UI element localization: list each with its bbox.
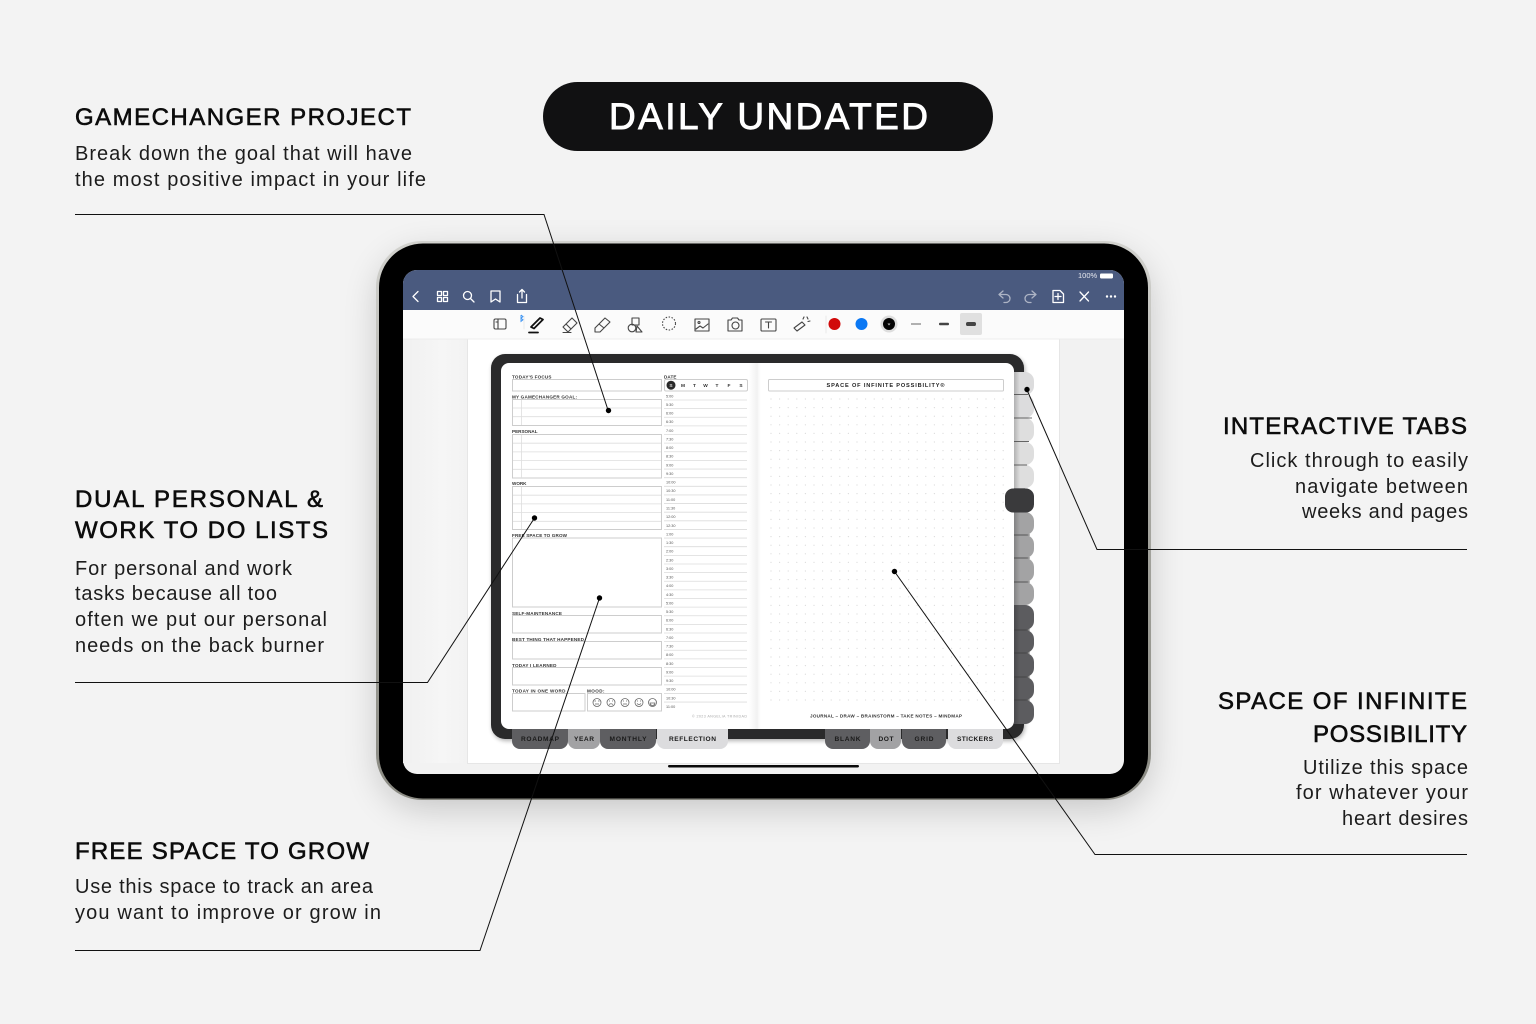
right page: dot grid: SPACE OF INFINITE POSSIBILITY® — [826, 382, 945, 389]
side gutters and page — [403, 339, 468, 763]
daily schedule column: 7:30 — [666, 438, 673, 442]
daily schedule column: 8:00 — [666, 446, 673, 450]
bottom tabs: DOT — [878, 736, 894, 743]
left page form: MOOD: — [587, 688, 605, 694]
bottom tabs: STICKERS — [957, 736, 994, 743]
callout: interactive tabs — [1223, 413, 1468, 523]
callout: free space to grow — [75, 838, 381, 924]
daily schedule column: F — [728, 383, 731, 389]
daily schedule column: © 2023 ANGELIA TRINIDAD — [692, 714, 747, 718]
leader line: gamechanger — [75, 214, 611, 413]
screen — [403, 270, 1124, 774]
daily schedule column: 12:30 — [666, 524, 676, 528]
bottom tabs: REFLECTION — [669, 736, 716, 743]
left page form: SELF-MAINTENANCE — [512, 611, 562, 616]
right page: dot grid: JOURNAL – DRAW – BRAINSTORM – TAKE NOTES – MINDMAP — [810, 714, 962, 718]
callout: interactive tabs: Click through to easily — [1250, 450, 1468, 472]
spine shadow — [749, 363, 761, 729]
daily schedule column — [664, 374, 748, 718]
daily schedule column: 11:30 — [666, 506, 675, 510]
daily schedule column: S — [669, 383, 673, 389]
daily schedule column: 4:30 — [666, 593, 673, 597]
callout: free space to grow: you want to improve or grow in — [75, 902, 381, 924]
daily schedule column: 10:00 — [666, 481, 676, 485]
daily schedule column: W — [703, 383, 708, 389]
daily schedule column: 2:00 — [666, 550, 673, 554]
bottom tabs: BLANK — [834, 736, 861, 743]
daily schedule column: DATE — [664, 374, 676, 380]
status: battery: 100% — [1078, 271, 1098, 280]
daily schedule column: 7:00 — [666, 636, 673, 640]
bottom tabs: GRID — [914, 736, 934, 743]
left page form — [512, 374, 662, 711]
left page form: TODAY IN ONE WORD — [512, 688, 566, 694]
daily schedule column: 6:30 — [666, 627, 673, 631]
callout: space of infinite possibility: for whatever your — [1296, 782, 1468, 804]
daily schedule column: 8:30 — [666, 662, 673, 666]
callout: dual personal and work lists: WORK TO DO LISTS — [75, 517, 328, 544]
callout: free space to grow: FREE SPACE TO GROW — [75, 838, 369, 865]
bluetooth mark — [521, 315, 523, 321]
left page form: FREE SPACE TO GROW — [512, 533, 568, 538]
daily schedule column: 6:30 — [666, 420, 673, 424]
toolbar — [403, 310, 1124, 339]
bottom tabs: ROADMAP — [521, 736, 560, 743]
daily schedule column: 11:00 — [666, 498, 675, 502]
callout: space of infinite possibility: SPACE OF INFINITE — [1218, 688, 1467, 715]
leader line: tabs — [1024, 387, 1467, 550]
callout: gamechanger project — [75, 104, 426, 191]
daily schedule column: 8:30 — [666, 455, 673, 459]
callout: gamechanger project: Break down the goal that will have — [75, 143, 412, 165]
daily schedule column: 10:30 — [666, 696, 676, 700]
daily schedule column: 9:30 — [666, 472, 673, 476]
toolbar tool icons — [494, 316, 826, 333]
callout: interactive tabs: navigate between — [1295, 476, 1468, 498]
daily schedule column: T — [693, 383, 696, 389]
mood faces — [593, 698, 656, 706]
status: battery — [1078, 271, 1113, 280]
daily schedule column: S — [739, 383, 743, 389]
callout: dual personal and work lists: often we put our personal — [75, 609, 327, 631]
daily schedule column: 2:30 — [666, 558, 673, 562]
daily schedule column: 9:00 — [666, 463, 673, 467]
daily schedule column: 3:30 — [666, 576, 673, 580]
left page form: WORK — [512, 481, 527, 486]
color swatches and stroke widths — [828, 313, 982, 335]
bottom tabs: MONTHLY — [610, 736, 647, 743]
tablet — [376, 241, 1151, 807]
daily schedule column: 11:00 — [666, 705, 675, 709]
daily schedule column: 1:00 — [666, 532, 673, 536]
daily schedule column: 7:00 — [666, 429, 673, 433]
callout: free space to grow: Use this space to track an area — [75, 876, 374, 898]
daily schedule column: 5:00 — [666, 394, 673, 398]
bottom tabs — [512, 729, 1003, 749]
left page form: TODAY I LEARNED — [512, 663, 557, 668]
icons: header left — [413, 290, 526, 302]
daily schedule column: 10:30 — [666, 489, 676, 493]
daily schedule column: 1:30 — [666, 541, 673, 545]
leader line: infinite possibility — [892, 569, 1467, 854]
title pill — [543, 82, 993, 151]
left page form: BEST THING THAT HAPPENED — [512, 637, 585, 642]
daily schedule column: 12:00 — [666, 515, 676, 519]
callout: interactive tabs: weeks and pages — [1301, 501, 1468, 523]
daily schedule column: 4:00 — [666, 584, 673, 588]
bottom tabs: YEAR — [574, 736, 594, 743]
callout: dual personal and work lists: For personal and work — [75, 558, 293, 580]
daily schedule column: 6:00 — [666, 412, 673, 416]
planner — [491, 354, 1034, 749]
left page form: PERSONAL — [512, 429, 538, 434]
callout: space of infinite possibility: POSSIBILITY — [1313, 721, 1467, 748]
icons: header right — [999, 290, 1088, 302]
callout: gamechanger project: the most positive impact in your life — [75, 169, 426, 191]
daily schedule column: 5:30 — [666, 403, 673, 407]
right page: dot grid — [768, 380, 1006, 718]
callout: dual personal and work lists: DUAL PERSONAL & — [75, 486, 323, 513]
callout: space of infinite possibility: heart desires — [1342, 808, 1468, 830]
side tabs — [1014, 372, 1034, 724]
daily schedule column: 9:00 — [666, 670, 673, 674]
callout: dual personal and work lists — [75, 486, 328, 657]
daily schedule column: 5:00 — [666, 601, 673, 605]
daily schedule column: M — [681, 383, 685, 389]
daily schedule column: 5:30 — [666, 610, 673, 614]
daily schedule column: 7:30 — [666, 645, 673, 649]
planner cover — [491, 354, 1024, 739]
icon: more dots — [1106, 295, 1116, 298]
daily schedule column: 8:00 — [666, 653, 673, 657]
daily schedule column: 6:00 — [666, 619, 673, 623]
home indicator — [668, 765, 859, 768]
callout: space of infinite possibility: Utilize this space — [1303, 757, 1468, 779]
callout: interactive tabs: INTERACTIVE TABS — [1223, 413, 1467, 440]
daily schedule column: 3:00 — [666, 567, 673, 571]
callout: space of infinite possibility — [1218, 688, 1468, 830]
left page form: TODAY'S FOCUS — [512, 374, 552, 380]
left page form: MY GAMECHANGER GOAL: — [512, 394, 577, 400]
callout: gamechanger project: GAMECHANGER PROJECT — [75, 104, 411, 131]
callout: dual personal and work lists: needs on the back burner — [75, 635, 324, 657]
leader line: free space — [75, 595, 602, 950]
callout: dual personal and work lists: tasks because all too — [75, 583, 277, 605]
app header bar — [403, 270, 1124, 310]
active side tab — [1005, 488, 1034, 512]
daily schedule column: 10:00 — [666, 688, 676, 692]
daily schedule column: T — [716, 383, 719, 389]
title pill: DAILY UNDATED — [609, 96, 928, 137]
planner page — [501, 363, 1014, 729]
daily schedule column: 9:30 — [666, 679, 673, 683]
leader line: personal and work — [75, 515, 537, 682]
